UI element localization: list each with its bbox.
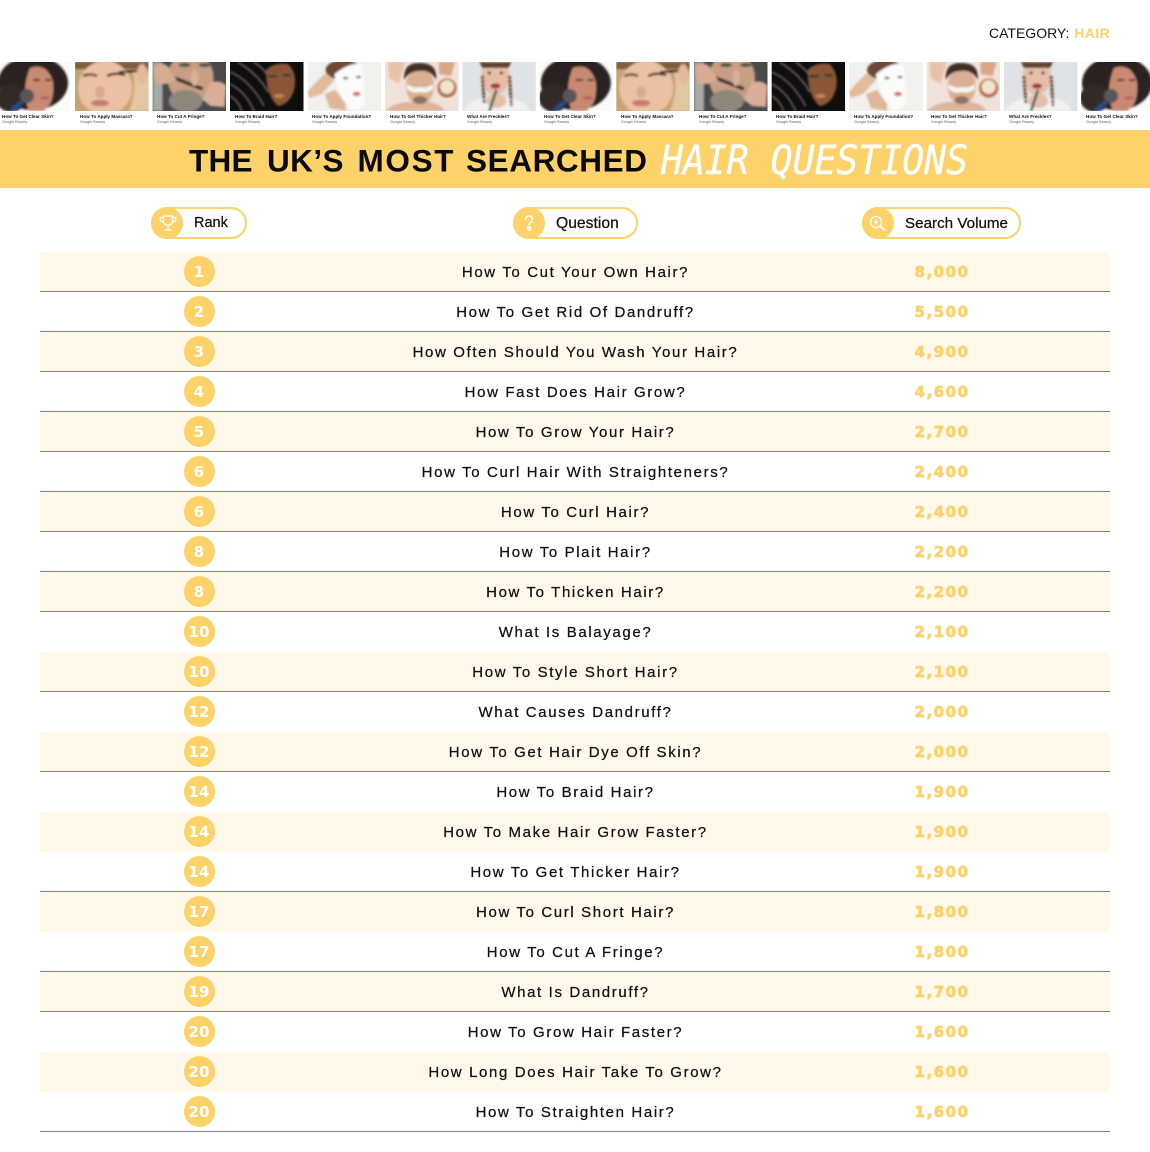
thumbnail: How To Braid Hair repeat: How To Braid Hair? xyxy=(776,114,818,119)
thumbnail: How To Apply Foundation: Google Beauty xyxy=(312,120,337,124)
row: rank 14 first: 14 xyxy=(188,783,210,801)
thumbnail: How To Apply Foundation repeat xyxy=(849,60,922,124)
thumbnail: How To Apply Foundation: How To Apply Foundation? xyxy=(312,114,371,119)
row: rank 8 second xyxy=(40,572,1110,612)
row: rank 12 first: 2,000 xyxy=(915,703,969,721)
row: rank 17 first: 1,800 xyxy=(915,903,969,921)
row: rank 17 second: 1,800 xyxy=(915,943,969,961)
thumbnail: How To Cut A Fringe repeat: How To Cut A Fringe? xyxy=(699,114,747,119)
thumbnail: How To Get Thicker Hair xyxy=(385,62,458,124)
row: rank 14 first: How To Braid Hair? xyxy=(496,784,655,801)
thumbnail: How To Apply Mascara: How To Apply Mascara? xyxy=(80,114,133,119)
label: Search Volume: Search Volume xyxy=(905,215,1008,232)
row: rank 14 second: How To Make Hair Grow Faster? xyxy=(443,824,708,841)
row: rank 12 first: What Causes Dandruff? xyxy=(478,704,673,721)
row: rank 4 xyxy=(40,372,1110,412)
thumbnail: How To Apply Mascara repeat xyxy=(616,61,690,124)
row: rank 6 first: 2,400 xyxy=(915,463,969,481)
row: rank 20 second: 1,600 xyxy=(915,1063,969,1081)
row: rank 10 first: What Is Balayage? xyxy=(499,624,652,641)
row: rank 20 second: 20 xyxy=(188,1063,210,1081)
label: Question: Question xyxy=(556,215,619,232)
row: rank 6 second xyxy=(40,492,1110,532)
thumbnail: How To Apply Foundation repeat: How To Apply Foundation? xyxy=(854,114,913,119)
thumbnail: How To Get Clear Skin: Google Beauty xyxy=(2,120,27,124)
thumbnail: What Are Freckles xyxy=(462,57,536,124)
row: rank 19: 19 xyxy=(188,983,210,1001)
thumbnail: How To Get Clear Skin repeat xyxy=(539,56,613,124)
row: rank 14 first: 1,900 xyxy=(915,783,969,801)
thumbnail: How To Get Clear Skin: How To Get Clear Skin? xyxy=(2,114,54,119)
row: rank 20 first xyxy=(184,1016,969,1047)
thumbnail: How To Braid Hair repeat: Google Beauty xyxy=(776,120,801,124)
row: rank 1: 8,000 xyxy=(915,263,969,281)
row: rank 17 first xyxy=(40,892,1110,932)
row: rank 6 second: 2,400 xyxy=(915,503,969,521)
row: rank 12 second: 2,000 xyxy=(915,743,969,761)
title: main text xyxy=(189,142,647,178)
row: rank 5: 5 xyxy=(194,423,204,441)
thumbnail: How To Get Thicker Hair repeat xyxy=(927,62,1000,124)
row: rank 2: How To Get Rid Of Dandruff? xyxy=(456,304,695,321)
row: rank 14 third: How To Get Thicker Hair? xyxy=(470,864,681,881)
row: rank 10 first: 10 xyxy=(188,623,210,641)
row: rank 12 second: 12 xyxy=(188,743,210,761)
thumbnail: How To Get Thicker Hair: How To Get Thicker Hair? xyxy=(390,114,446,119)
thumbnail: How To Cut A Fringe: Google Beauty xyxy=(157,120,182,124)
row: rank 20 third: 20 xyxy=(188,1103,210,1121)
thumbnail: What Are Freckles repeat xyxy=(1004,57,1078,124)
row: rank 17 second: How To Cut A Fringe? xyxy=(487,944,664,961)
title banner xyxy=(0,130,1150,188)
title: main text: THE xyxy=(189,142,252,178)
thumbnail: What Are Freckles: What Are Freckles? xyxy=(467,114,510,119)
row: rank 14 second: 1,900 xyxy=(915,823,969,841)
thumbnail: How To Cut A Fringe repeat: Google Beauty xyxy=(699,120,724,124)
thumbnail: How To Get Clear Skin repeat: How To Get Clear Skin? xyxy=(544,114,596,119)
row: rank 10 first: 2,100 xyxy=(915,623,969,641)
row: rank 20 third: 1,600 xyxy=(915,1103,969,1121)
thumbnail: What Are Freckles: Google Beauty xyxy=(467,120,492,124)
row: rank 3: How Often Should You Wash Your Hair? xyxy=(413,344,738,361)
category label: CATEGORY: HAIR xyxy=(989,25,1110,41)
row: rank 6 second: 6 xyxy=(194,503,204,521)
row: rank 4: How Fast Does Hair Grow? xyxy=(465,384,686,401)
row: rank 17 second xyxy=(40,932,1110,972)
row: rank 1: How To Cut Your Own Hair? xyxy=(462,264,689,281)
column header: Question xyxy=(513,207,638,239)
thumbnail: How To Apply Foundation repeat: Google Beauty xyxy=(854,120,879,124)
thumbnail: How To Cut A Fringe: How To Cut A Fringe? xyxy=(157,114,205,119)
row: rank 8 first: How To Plait Hair? xyxy=(499,544,652,561)
thumbnail: How To Apply Foundation xyxy=(308,60,381,124)
column header: Rank xyxy=(151,207,247,239)
row: rank 20 first: How To Grow Hair Faster? xyxy=(468,1024,683,1041)
title: main text: SEARCHED xyxy=(466,142,647,178)
thumbnail: How To Get Clear Skin final: Google Beauty xyxy=(1086,120,1111,124)
row: rank 1 xyxy=(40,252,1110,292)
thumbnail: How To Braid Hair repeat xyxy=(772,62,845,124)
thumbnail: How To Apply Mascara repeat: How To Apply Mascara? xyxy=(621,114,674,119)
row: rank 17 first: How To Curl Short Hair? xyxy=(476,904,675,921)
row: rank 14 second xyxy=(40,812,1110,852)
row: rank 14 third: 14 xyxy=(188,863,210,881)
row: rank 14 second: 14 xyxy=(188,823,210,841)
icon: question mark xyxy=(524,215,534,231)
row: rank 10 second: How To Style Short Hair? xyxy=(472,664,679,681)
row: rank 5: How To Grow Your Hair? xyxy=(476,424,675,441)
row: rank 3 xyxy=(40,332,1110,372)
row: rank 10 first xyxy=(184,616,969,647)
thumbnail: How To Get Thicker Hair repeat: Google Beauty xyxy=(931,120,956,124)
row: rank 12 second: How To Get Hair Dye Off Skin? xyxy=(449,744,702,761)
thumbnail: How To Get Clear Skin repeat: Google Beauty xyxy=(544,120,569,124)
row: rank 4: 4,600 xyxy=(915,383,969,401)
row: rank 1: 1 xyxy=(194,263,204,281)
photo strip: how-to video thumbnails xyxy=(0,62,1150,124)
row: rank 19: What Is Dandruff? xyxy=(501,984,650,1001)
row: rank 14 first xyxy=(184,776,969,807)
row: rank 20 second: How Long Does Hair Take To Grow? xyxy=(428,1064,723,1081)
row: rank 6 first xyxy=(40,452,1110,492)
row: rank 19 xyxy=(40,972,1110,1012)
row: rank 14 third xyxy=(40,852,1110,892)
row: rank 8 first: 2,200 xyxy=(915,543,969,561)
row: rank 8 second: How To Thicken Hair? xyxy=(486,584,665,601)
row: rank 10 second: 2,100 xyxy=(915,663,969,681)
row: rank 8 second: 2,200 xyxy=(915,583,969,601)
row: rank 17 second: 17 xyxy=(188,943,210,961)
thumbnail: How To Braid Hair: Google Beauty xyxy=(235,120,260,124)
row: rank 2: 2 xyxy=(194,303,204,321)
row: rank 14 third: 1,900 xyxy=(915,863,969,881)
thumbnail: How To Braid Hair: How To Braid Hair? xyxy=(235,114,277,119)
thumbnail: What Are Freckles repeat: Google Beauty xyxy=(1009,120,1034,124)
title: main text: UK’S xyxy=(267,142,344,178)
row: rank 20 second xyxy=(40,1052,1110,1092)
title: main text: MOST xyxy=(358,142,454,178)
row: rank 12 first xyxy=(184,696,969,727)
row: rank 20 first: 1,600 xyxy=(915,1023,969,1041)
title: handwritten text: HAIR QUESTIONS xyxy=(660,138,968,184)
row: rank 4: 4 xyxy=(194,383,204,401)
row: rank 8 first: 8 xyxy=(194,543,204,561)
row: rank 12 first: 12 xyxy=(188,703,210,721)
row: rank 6 first: How To Curl Hair With Straighteners? xyxy=(422,464,729,481)
thumbnail: How To Cut A Fringe xyxy=(153,52,226,124)
row: rank 5: 2,700 xyxy=(915,423,969,441)
thumbnail: What Are Freckles repeat: What Are Freckles? xyxy=(1009,114,1052,119)
row: rank 19: 1,700 xyxy=(915,983,969,1001)
row: rank 2: 5,500 xyxy=(915,303,969,321)
row: rank 3: 3 xyxy=(194,343,204,361)
row: rank 20 third xyxy=(40,1092,1110,1132)
row: rank 2 xyxy=(40,292,1110,332)
icon: trophy xyxy=(159,215,177,231)
row: rank 20 first: 20 xyxy=(188,1023,210,1041)
row: rank 6 second: How To Curl Hair? xyxy=(501,504,650,521)
label: Rank: Rank xyxy=(194,215,228,231)
row: rank 12 second xyxy=(40,732,1110,772)
row: rank 10 second: 10 xyxy=(188,663,210,681)
row: rank 6 first: 6 xyxy=(194,463,204,481)
thumbnail: How To Braid Hair xyxy=(230,62,304,124)
thumbnail: How To Get Thicker Hair repeat: How To Get Thicker Hair? xyxy=(931,114,987,119)
thumbnail: How To Get Clear Skin final xyxy=(1080,56,1150,124)
thumbnail: How To Apply Mascara repeat: Google Beauty xyxy=(621,120,646,124)
row: rank 20 third: How To Straighten Hair? xyxy=(476,1104,675,1121)
thumbnail: How To Get Clear Skin xyxy=(0,56,70,124)
thumbnail: How To Cut A Fringe repeat xyxy=(694,52,768,124)
row: rank 17 first: 17 xyxy=(188,903,210,921)
thumbnail: How To Get Clear Skin final: How To Get Clear Skin? xyxy=(1086,114,1138,119)
icon: magnifier xyxy=(870,216,886,232)
thumbnail: How To Get Thicker Hair: Google Beauty xyxy=(390,120,415,124)
thumbnail: How To Apply Mascara: Google Beauty xyxy=(80,120,105,124)
row: rank 3: 4,900 xyxy=(915,343,969,361)
row: rank 5 xyxy=(40,412,1110,452)
row: rank 10 second xyxy=(40,652,1110,692)
row: rank 8 second: 8 xyxy=(194,583,204,601)
row: rank 8 first xyxy=(40,532,1110,572)
thumbnail: How To Apply Mascara xyxy=(75,61,149,124)
column header: Search Volume xyxy=(862,207,1021,239)
